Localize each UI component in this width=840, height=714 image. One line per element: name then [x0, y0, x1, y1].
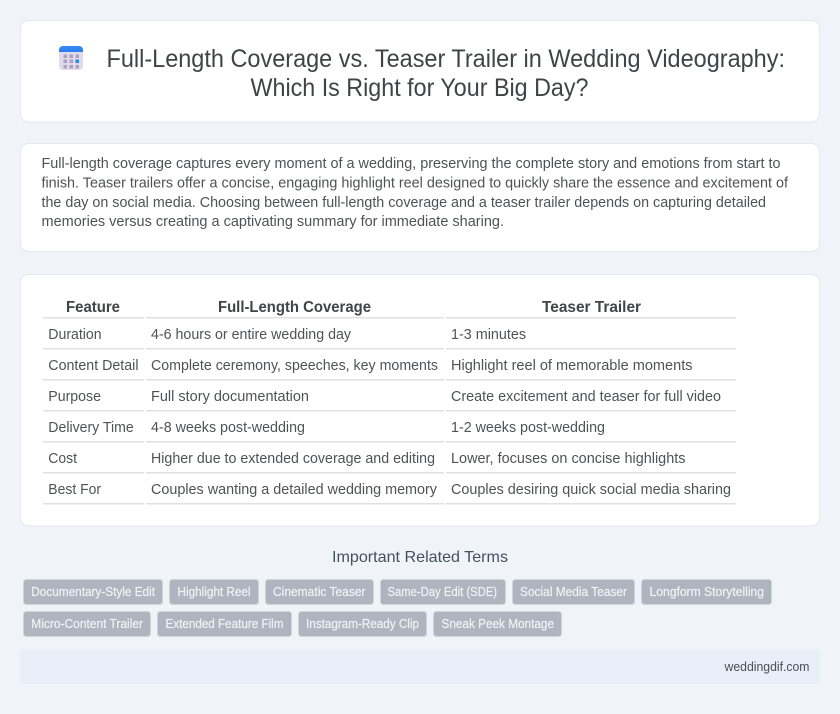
table row: delivery time — [43, 420, 736, 442]
title — [106, 45, 785, 102]
footer — [20, 650, 820, 684]
table row: delivery time: 1-2 weeks post-wedding — [451, 420, 605, 436]
tag: extended feature film: Extended Feature Film — [166, 617, 284, 631]
title: Which Is Right for Your Big Day? — [250, 74, 588, 102]
heading: important related terms: Important Related Terms — [332, 549, 508, 566]
tag: longform storytelling — [642, 580, 772, 604]
icon: calendar — [59, 46, 83, 70]
footer: weddingdif.com — [724, 659, 810, 674]
table header row: Full-Length Coverage — [218, 299, 371, 316]
tag: instagram-ready clip: Instagram-Ready Clip — [306, 617, 419, 631]
table header row: Teaser Trailer — [542, 299, 641, 316]
table row: content detail: Highlight reel of memorable moments — [451, 358, 692, 374]
tag: extended feature film — [158, 612, 292, 636]
table row: duration: 1-3 minutes — [451, 327, 526, 343]
table row: cost — [43, 451, 736, 474]
panel: comparison table — [20, 274, 820, 526]
text block: introduction paragraph: Full-length coverage captures every moment of a wedding, preserving the complete story and emotions from start to — [42, 156, 781, 172]
table row: best for: Couples wanting a detailed wedding memory — [151, 482, 438, 498]
table row: purpose — [43, 389, 736, 412]
table row: content detail: Content Detail — [48, 358, 138, 374]
text block: introduction paragraph — [42, 156, 788, 230]
table row: delivery time: Delivery Time — [48, 420, 134, 436]
table row: delivery time: 4-8 weeks post-wedding — [151, 420, 305, 436]
tag: social media teaser: Social Media Teaser — [520, 585, 627, 599]
table row: purpose: Full story documentation — [151, 389, 309, 405]
table row: purpose: Purpose — [48, 389, 101, 405]
tag: documentary-style edit: Documentary-Style Edit — [31, 585, 155, 599]
tag: micro-content trailer — [24, 612, 150, 636]
table row: content detail: Complete ceremony, speeches, key moments — [151, 358, 438, 374]
table header row — [43, 299, 736, 318]
tag: sneak peek montage — [434, 612, 562, 636]
text block: introduction paragraph: the day on social media. Choosing between full-length coverage and a teaser trailer depends on capturing detailed — [42, 195, 766, 211]
related term tags — [24, 580, 772, 636]
table row: duration — [43, 327, 736, 350]
tag: cinematic teaser: Cinematic Teaser — [273, 585, 366, 599]
tag: cinematic teaser — [266, 580, 374, 604]
table row: duration: Duration — [48, 327, 102, 343]
table row: cost: Lower, focuses on concise highlights — [451, 451, 686, 467]
tag: micro-content trailer: Micro-Content Trailer — [31, 617, 143, 631]
panel: introduction — [20, 144, 820, 252]
title: Full-Length Coverage vs. Teaser Trailer in Wedding Videography: — [106, 45, 785, 73]
tag: same-day edit — [380, 580, 506, 604]
text block: introduction paragraph: memories versus creating a captivating summary for immediate sharing. — [42, 214, 504, 230]
panel: header — [20, 20, 820, 122]
tag: sneak peek montage: Sneak Peek Montage — [442, 617, 554, 631]
tag: highlight reel: Highlight Reel — [178, 585, 250, 599]
tag: highlight reel — [170, 580, 258, 604]
tag: instagram-ready clip — [298, 612, 426, 636]
table row: best for: Best For — [48, 482, 101, 498]
table row: cost: Cost — [48, 451, 77, 467]
text block: introduction paragraph: finish. Teaser trailers offer a concise, engaging highlight reel designed to quickly share the essence and excitement of — [42, 176, 788, 192]
tag: social media teaser — [512, 580, 634, 604]
tag: longform storytelling: Longform Storytelling — [650, 585, 764, 599]
table row: content detail — [43, 358, 736, 380]
table row: best for — [43, 482, 736, 504]
tag: documentary-style edit — [24, 580, 162, 604]
table header row: Feature — [66, 299, 120, 316]
table row: cost: Higher due to extended coverage and editing — [151, 451, 435, 467]
table row: duration: 4-6 hours or entire wedding day — [151, 327, 352, 343]
tag: same-day edit: Same-Day Edit (SDE) — [388, 585, 497, 599]
table row: best for: Couples desiring quick social media sharing — [451, 482, 731, 498]
table row: purpose: Create excitement and teaser for full video — [451, 389, 721, 405]
